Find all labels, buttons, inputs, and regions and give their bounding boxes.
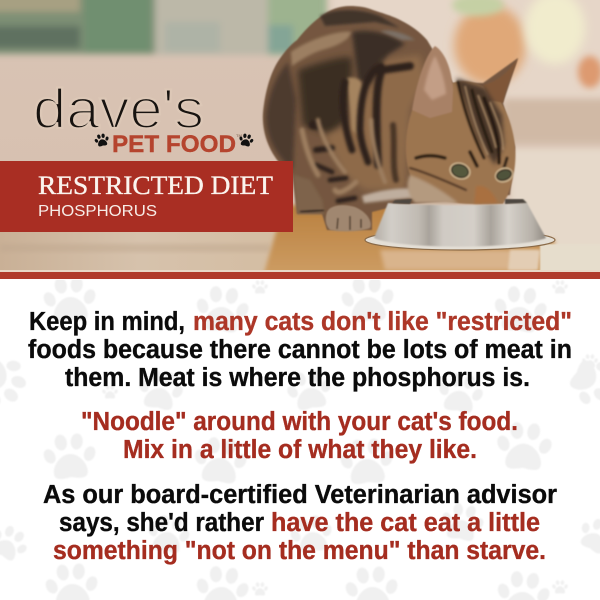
bowl inner rim: [392, 199, 527, 204]
icon: left logo paw: [93, 132, 110, 147]
text block: keep in mind: them. Meat is where the phosphorus is.: [65, 364, 530, 392]
cat nose: [474, 186, 498, 204]
text block: veterinarian advisor: something "not on the menu" than starve.: [53, 537, 546, 565]
banner subheading: PHOSPHORUS: [38, 203, 157, 220]
cat tabby stripes: [313, 66, 410, 201]
text block: keep in mind: [28, 308, 572, 392]
text block: noodle around: [81, 408, 518, 464]
text block: noodle around: "Noodle" around with your cat's food.: [81, 408, 518, 436]
cat dark forehead patch: [456, 78, 504, 165]
logo wordmark dave's: dave's: [33, 77, 204, 140]
dark back band: [266, 62, 296, 170]
text block: veterinarian advisor: says, she'd rather: [59, 509, 264, 537]
logo trademark: TM: [236, 133, 242, 138]
logo: dave's pet food: [33, 77, 255, 158]
cat light tan stripe: [291, 32, 352, 66]
cat eyes: [448, 162, 472, 180]
cat haunch: [294, 175, 324, 214]
orange flank: [325, 55, 425, 190]
bowl flange: [364, 234, 556, 251]
icon: right logo paw: [238, 132, 255, 147]
cat tan leg and stripes: [302, 120, 385, 192]
dark shoulder patches: [298, 57, 352, 135]
banner heading: RESTRICTED DIET: [38, 170, 273, 200]
red divider strip: [0, 272, 600, 279]
text block: noodle around: Mix in a little of what they like.: [123, 436, 477, 464]
cat light forehead marks: [465, 86, 503, 155]
paw print background pattern: [0, 274, 600, 600]
cat white chest: [362, 188, 422, 203]
text block: keep in mind: foods because there cannot be lots of meat in: [28, 336, 572, 364]
text block: keep in mind: Keep in mind,: [29, 308, 185, 336]
cat forehead stripes: [410, 82, 507, 190]
cat cheek fur: [408, 175, 458, 203]
banner: restricted diet: [0, 161, 293, 232]
photo: cat eating from a metal bowl: [0, 0, 600, 280]
text block: keep in mind: many cats don't like "restricted": [193, 308, 572, 336]
photo background: blurred room and floor: [0, 0, 600, 280]
text block: veterinarian advisor: As our board-certified Veterinarian advisor: [43, 481, 557, 509]
logo wordmark pet food: PET FOOD: [112, 131, 236, 158]
text block: veterinarian advisor: [43, 481, 557, 565]
metal food bowl: [365, 199, 555, 250]
bowl wall: [374, 203, 546, 247]
cat body: [263, 6, 518, 230]
text block: veterinarian advisor: have the cat eat a little: [271, 509, 540, 537]
cat paw: [326, 205, 371, 231]
cat head and ears: [406, 46, 518, 204]
